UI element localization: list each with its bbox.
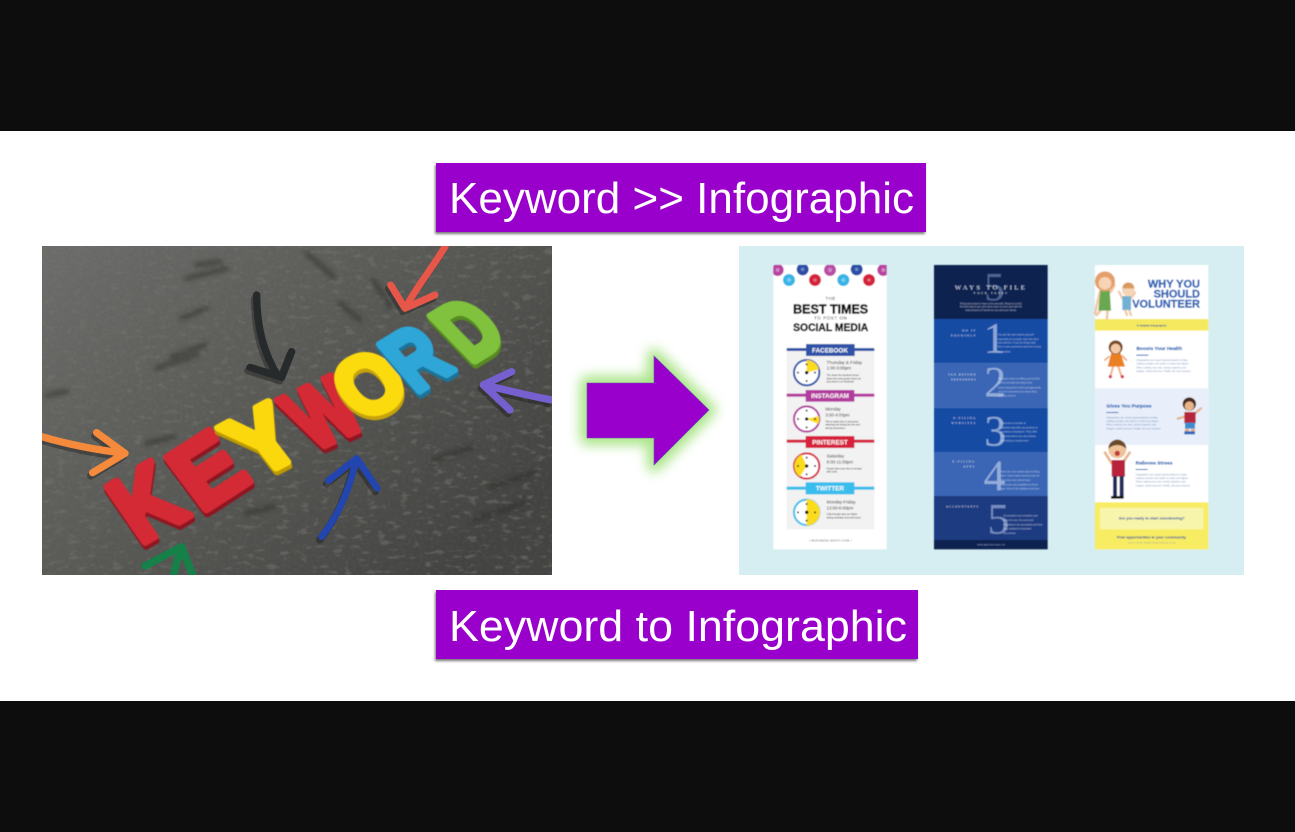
letter W: W [265, 359, 381, 467]
section: Gives You Purpose: Gives You Purpose [1106, 403, 1152, 409]
letter O [333, 351, 406, 421]
step 3: 3 [984, 408, 1006, 456]
step 4: There are now mobile apps for filing [1000, 470, 1040, 473]
letter Y: Y [205, 385, 321, 495]
step 2: your tax returns. [998, 395, 1017, 398]
infographic: 5 ways to file your taxes [934, 265, 1048, 549]
heading: SHOULD [1154, 289, 1200, 301]
step 1: 1 [984, 315, 1005, 363]
arrow: red [391, 247, 445, 308]
section: Instagram [787, 390, 874, 432]
step 5 [946, 495, 1043, 543]
section: Facebook: 1:00-3:00pm [827, 365, 851, 370]
section: Boosts Your Health: making complex info easier to share and digest. [1136, 363, 1189, 366]
step 3: a variety of taxpayers. They offer [1001, 431, 1037, 434]
call to action: VISIT US AT WWW.HOWTOGIVE.COM [1128, 541, 1176, 544]
letter K [102, 456, 196, 550]
step 3: websites that offer tax services to [1001, 426, 1038, 429]
step 2: PREPARERS [951, 377, 977, 381]
section: Facebook: FACEBOOK [812, 347, 848, 354]
step 4: taxes. Some basic services such as [1000, 475, 1040, 478]
step 1 [951, 315, 1041, 363]
step 4 [952, 452, 1040, 500]
step 5: taxes for you. At a cost and [1003, 519, 1034, 522]
section: Twitter [787, 482, 874, 526]
letter R: R [364, 312, 470, 413]
section: Facebook [787, 344, 874, 385]
step 4: 4 [984, 452, 1005, 500]
header text: WAYS TO FILE [955, 284, 1027, 291]
step 5: documents. [1003, 532, 1016, 535]
section: Facebook: Thursday & Friday [827, 360, 863, 365]
section: Gives You Purpose: Infographics are visual representations of data, [1106, 416, 1158, 419]
section: Relieves Stress: images, charts and text. Finally, cite your sources. [1136, 484, 1191, 487]
panel: infographic samples [739, 246, 1244, 575]
title: Keyword >> Infographic: Keyword >> Infographic [449, 174, 914, 223]
step 1: You can file your returns yourself [998, 333, 1034, 336]
section: Pinterest: Saturday [827, 453, 845, 458]
letter W: W [266, 363, 382, 471]
step 2: so it isn't stressful to do about filing [998, 390, 1037, 393]
step 1: YOURSELF [951, 333, 977, 337]
section: Twitter: TWITTER [816, 486, 844, 493]
section: Instagram: Monday [825, 406, 842, 411]
title: Keyword >> Infographic [435, 163, 926, 234]
header text: YOUR TAXES [973, 291, 1009, 295]
social icons row [772, 263, 889, 286]
step 1: DO IT [962, 329, 977, 333]
letter D: D [413, 284, 525, 382]
call to action [1117, 516, 1187, 544]
step 1: and submit it. If you do things right, [998, 341, 1037, 344]
step 2: 2 [984, 359, 1006, 407]
section: Gives You Purpose: making complex info easier to share and digest. [1106, 420, 1159, 423]
letter R: R [363, 308, 469, 409]
step 3: according to requirement. [1001, 440, 1029, 443]
section: Gives You Purpose: images, charts and text. Finally, cite your sources. [1106, 427, 1162, 430]
KEYWORD wooden letters [102, 300, 502, 550]
letter K: K [92, 447, 204, 567]
letter W [272, 372, 363, 454]
header text [955, 265, 1027, 312]
section: Instagram: INSTAGRAM [811, 393, 849, 400]
arrow: green [145, 547, 193, 577]
step 4: returns are only available on these [1000, 483, 1039, 486]
heading: SOCIAL MEDIA [793, 322, 868, 334]
section: Relieves Stress: When making your own, simply organize your [1136, 481, 1186, 484]
letter E [162, 426, 256, 518]
step 2 [948, 359, 1042, 407]
heading [1132, 278, 1200, 311]
step 4: filing taxes and refund track [1000, 479, 1031, 482]
letter R [375, 326, 460, 400]
step 3 [951, 408, 1038, 456]
call to action: Are you ready to start volunteering? [1119, 516, 1185, 520]
header text: least amount of hassle for you and your family. [965, 309, 1017, 312]
section: Facebook: and check in on Facebook. [827, 382, 855, 384]
letter Y [213, 397, 293, 476]
caption: Keyword to Infographic: Keyword to Infographic [449, 602, 907, 651]
letter K: K [91, 443, 203, 563]
step 2: TAX RETURN [948, 373, 977, 377]
heading: THE [825, 296, 836, 301]
step 5: ACCOUNTANTS [946, 505, 979, 509]
footer: / BUSINESS-SAVVY.COM / [809, 538, 852, 542]
step 1: especially on a simple, fuss-free form [998, 338, 1039, 341]
section: Instagram: stirring interactions. [825, 427, 846, 430]
subtitle strip: A Helpful Infographic [1137, 323, 1167, 327]
section: Facebook: The closer the weekend comes [827, 374, 860, 377]
step 2: clients and take the drag of tax [998, 382, 1033, 385]
letter D [426, 300, 502, 370]
arrow: blue [322, 458, 377, 537]
header text: the best way to get your taxes done on time and with the [960, 306, 1023, 309]
heading: TO POST ON [814, 316, 847, 321]
step 4: apps. Most of the platforms are free. [1000, 488, 1040, 491]
photo: keyword letters with arrows [41, 246, 552, 577]
section: Facebook: above the most people check out [827, 377, 861, 380]
arrows pointing at the word [41, 247, 552, 577]
header text: Filing taxes doesn't have to be stressful. Read on to find [960, 302, 1022, 305]
section: Boosts Your Health: When making your own, simply organize your [1136, 366, 1187, 369]
section: Boosts Your Health: images, charts and text. Finally, cite your sources. [1136, 370, 1192, 373]
step 4: APPS [963, 464, 976, 468]
step 1: this is more convenient and free of cost [998, 346, 1041, 349]
step 3: WEBSITES [951, 421, 977, 425]
step 3: E-FILING [953, 416, 977, 420]
bottom black band [0, 701, 1295, 832]
section: Instagram: 3:00-4:00pm [825, 412, 850, 417]
section: Pinterest [787, 436, 874, 479]
letter E: E [150, 415, 266, 533]
section: Boosts Your Health: Infographics are visual representations of data, [1136, 359, 1188, 362]
section: Twitter: 12:00-6:00pm [827, 505, 854, 510]
letter O: O [314, 334, 426, 442]
arrow: orange [42, 433, 125, 473]
section: Pinterest: People have more time to sit back [827, 467, 863, 470]
header text: 5 [984, 265, 1004, 310]
photo background: concrete surface [42, 246, 552, 575]
step 5: regulations can accurately and they [1003, 523, 1043, 526]
footer: WWW.TAXFILINGGUIDE.COM [977, 544, 1005, 547]
section: Instagram: watching less during the time and [825, 424, 861, 427]
caption: Keyword to Infographic [435, 590, 918, 661]
section: Gives You Purpose: When making your own, simply organize your [1106, 424, 1157, 427]
step 5: stay updated of important [1003, 528, 1032, 531]
section: Relieves Stress: Infographics are visual representations of data, [1136, 473, 1188, 476]
step 3: There are a number of [1001, 422, 1026, 425]
heading [793, 296, 868, 334]
section: Twitter: Click-through rates are higher [827, 513, 858, 516]
step 4: E-FILING [952, 460, 976, 464]
letter E: E [149, 411, 265, 529]
section: Instagram: This is mainly due to consumers [825, 420, 859, 423]
arrow: purple [483, 372, 552, 410]
step 1: to complete. [998, 351, 1012, 354]
heading: VOLUNTEER [1132, 299, 1200, 311]
section: Pinterest: after work. [827, 471, 838, 474]
heading: WHY YOU [1148, 278, 1200, 290]
letter Y: Y [206, 389, 322, 499]
call to action: Find opportunities in your community. [1117, 536, 1187, 540]
section: Relieves Stress: Relieves Stress [1136, 460, 1173, 466]
section: Twitter: Monday-Friday [827, 499, 856, 504]
letter D: D [412, 280, 524, 378]
arrow: black [250, 295, 292, 377]
step 5: Accountants can complete your [1003, 515, 1038, 518]
step 5: 5 [988, 495, 1009, 543]
step 2: return preparers's work and paperwork [998, 386, 1042, 389]
section: Relieves Stress [1105, 440, 1191, 499]
section: Pinterest: PINTEREST [812, 439, 848, 446]
arrow: purple with green glow [587, 356, 709, 465]
illustration: girl and boy [1095, 271, 1135, 318]
letter O: O [313, 330, 425, 438]
top black band [0, 0, 1295, 131]
infographic: best times to post on social media [772, 263, 889, 549]
section: Boosts Your Health: Boosts Your Health [1136, 346, 1182, 352]
infographic: why you should volunteer [1095, 265, 1208, 549]
heading: BEST TIMES [793, 301, 868, 316]
step 3: a sweep where you can choose [1001, 435, 1036, 438]
section: Pinterest: 8:00-11:00pm [827, 459, 853, 464]
section: Twitter: during weekdays and work hours. [827, 516, 862, 519]
step 2: Preparers have a sniffing eye for their [998, 377, 1040, 380]
section: Relieves Stress: making complex info easier to share and digest. [1136, 477, 1189, 480]
section: Boosts Your Health [1105, 340, 1192, 378]
section: Gives You Purpose [1106, 397, 1201, 434]
